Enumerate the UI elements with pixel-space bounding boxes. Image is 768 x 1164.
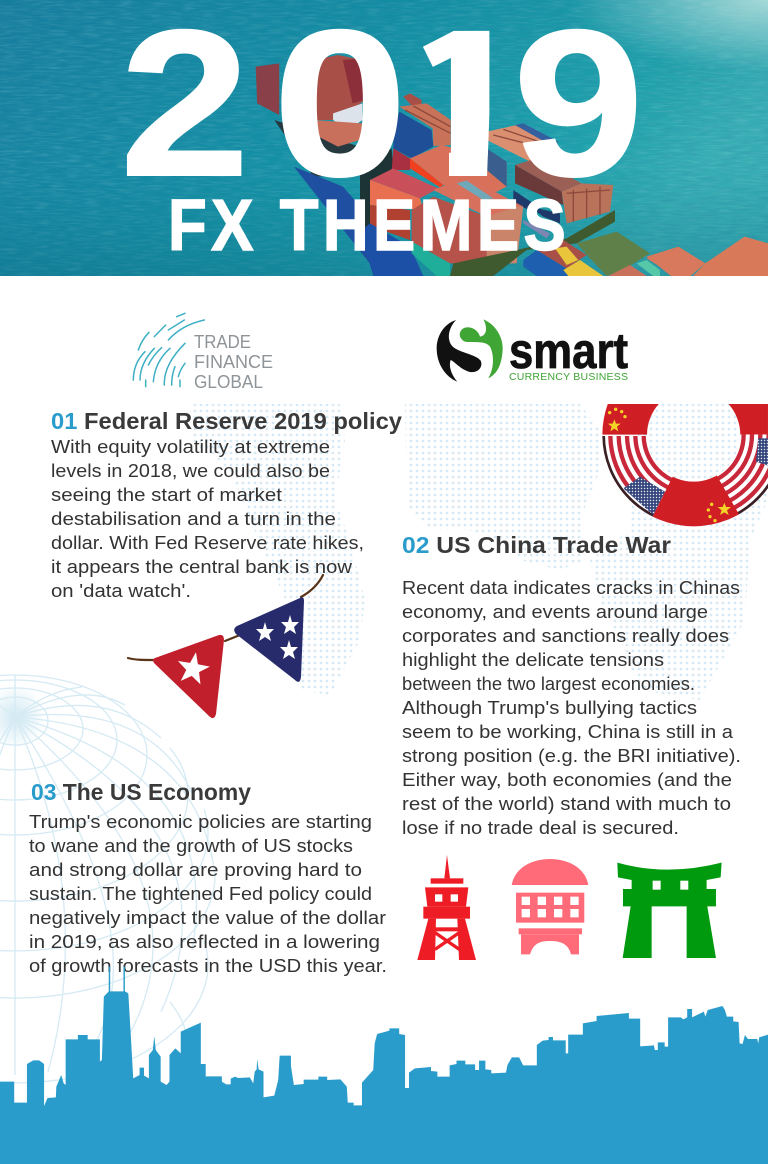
section 01 heading: 01 Federal Reserve 2019 policy [51, 408, 402, 434]
section 03 body text: to wane and the growth of US stocks [29, 836, 353, 856]
section 02 body text: Either way, both economies (and the [402, 770, 732, 790]
logo mark: arcs [133, 313, 204, 387]
bunting: US flags on rope [128, 575, 323, 718]
globe wireframe [0, 675, 215, 1155]
icon: red tower [417, 855, 476, 960]
navy pennant [234, 597, 304, 682]
logo wordmark: smart [509, 323, 628, 379]
city skyline [0, 967, 768, 1164]
section 02 body text: seem to be working, China is still in a [402, 722, 734, 742]
section 01 body text: levels in 2018, we could also be [51, 461, 330, 481]
section 03 body text: and strong dollar are proving hard to [29, 860, 362, 880]
header photo: container ship on teal water [0, 0, 768, 276]
section 03 body text [29, 812, 387, 976]
section 01 body text: on 'data watch'. [51, 581, 191, 601]
section 02 body text [402, 578, 741, 838]
container ship: midship section [360, 93, 660, 276]
flag ring: China and US flags [604, 345, 768, 525]
logo: Trade Finance Global [133, 313, 273, 392]
stars [608, 408, 731, 522]
section 02 body text: Although Trump's bullying tactics [402, 698, 697, 718]
section 01 body text: With equity volatility at extreme [51, 437, 330, 457]
icon: green torii gate [617, 863, 722, 958]
US flag segment right [717, 434, 768, 514]
section 02 body text: strong position (e.g. the BRI initiative). [402, 746, 741, 766]
logo wordmark [194, 332, 273, 392]
China flag segments top [602, 404, 768, 435]
section 01 body text: destabilisation and a turn in the [51, 509, 336, 529]
logo: Smart Currency Business [437, 319, 628, 383]
section 02 body text: economy, and events around large [402, 602, 708, 622]
logo wordmark: GLOBAL [194, 372, 263, 392]
section 01 body text: seeing the start of market [51, 485, 282, 505]
logo: Smart Currency Business: CURRENCY BUSINESS [509, 371, 628, 383]
red pennant [153, 635, 224, 718]
section 03 body text: in 2019, as also reflected in a lowering [29, 932, 380, 952]
section 02 body text: lose if no trade deal is secured. [402, 818, 679, 838]
landmark icons [417, 855, 722, 960]
section 01 body text: dollar. With Fed Reserve rate hikes, [51, 533, 364, 553]
section 03 body text: of growth forecasts in the USD this year. [29, 956, 387, 976]
container ship: bow section [256, 55, 768, 276]
logo wordmark: TRADE [194, 332, 251, 352]
section 03 body text: sustain. The tightened Fed policy could [29, 884, 372, 904]
section 03 body text: Trump's economic policies are starting [29, 812, 372, 832]
section 01 body text [51, 437, 364, 601]
icon: pink domed building [512, 859, 588, 954]
section 02 body text: corporates and sanctions really does [402, 626, 729, 646]
logo wordmark: FINANCE [194, 352, 273, 372]
section 02 heading: 02 US China Trade War [402, 532, 671, 558]
section 02 body text: rest of the world) stand with much to [402, 794, 731, 814]
dotted world map background [190, 404, 768, 700]
title: 2019 [126, 28, 636, 178]
US flag segment left [602, 436, 672, 517]
section 02 body text: highlight the delicate tensions [402, 650, 664, 670]
section 02 body text: between the two largest economies. [402, 674, 695, 694]
section 03 heading: 03 The US Economy [31, 779, 251, 805]
title: FX THEMES: FX THEMES [168, 186, 566, 266]
section 03 body text: negatively impact the value of the dollar [29, 908, 386, 928]
China flag segment bottom [652, 476, 739, 526]
logo mark: S [437, 319, 503, 382]
section 01 body text: it appears the central bank is now [51, 557, 353, 577]
section 02 body text: Recent data indicates cracks in Chinas [402, 578, 740, 598]
